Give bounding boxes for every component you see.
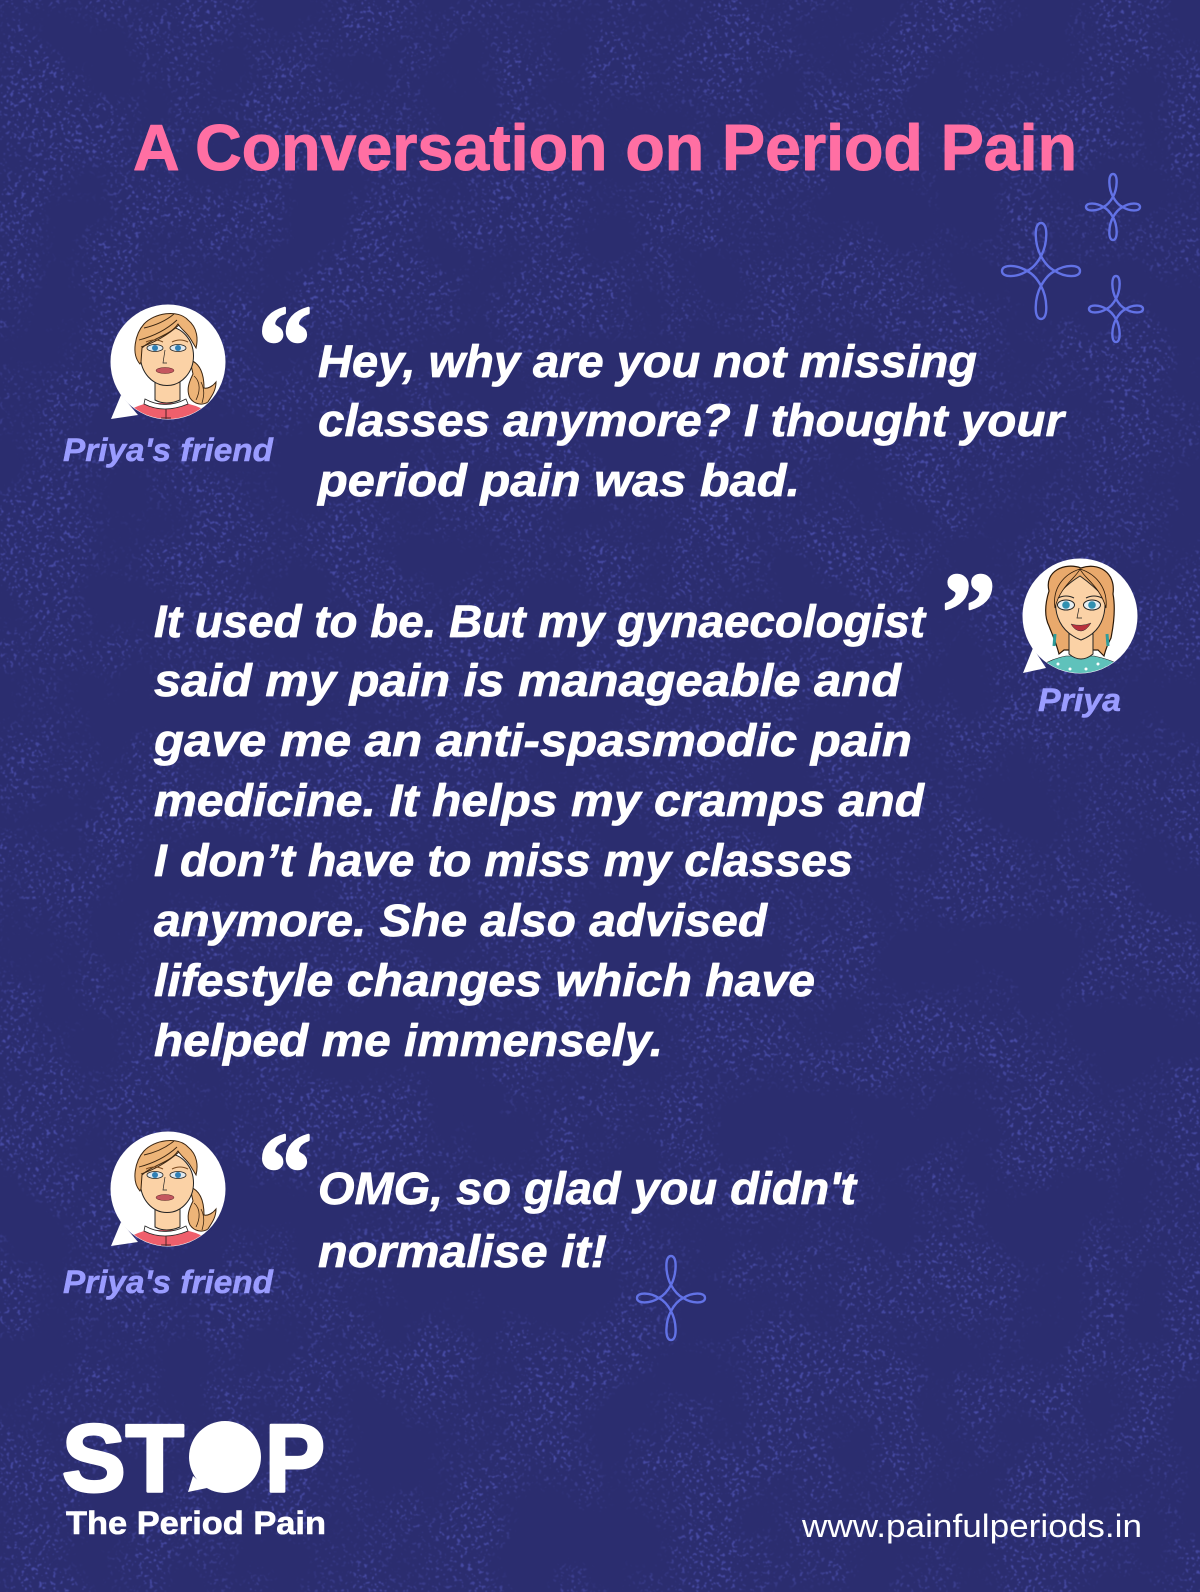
title: A Conversation on Period Pain <box>133 111 1077 184</box>
label: Priya's friend (first): Priya's friend <box>63 432 275 468</box>
message: friend asks: classes anymore? I thought your <box>318 395 1067 446</box>
avatar: Priya's friend (second) <box>110 1132 226 1249</box>
logo: STOP The Period Pain: P <box>265 1405 325 1512</box>
message: friend replies <box>318 1163 858 1277</box>
message: Priya answers: medicine. It helps my cramps and <box>154 775 926 826</box>
logo: STOP The Period Pain: The Period Pain <box>66 1505 326 1541</box>
website url: www.painfulperiods.in <box>801 1508 1142 1544</box>
avatar: Priya's friend (first) <box>110 304 226 422</box>
message: Priya answers: gave me an anti-spasmodic pain <box>153 715 912 766</box>
message: friend replies: OMG, so glad you didn't <box>318 1163 858 1214</box>
icon: opening quote (second): “ <box>258 1111 312 1235</box>
message: Priya answers: It used to be. But my gynaecologist <box>154 596 927 647</box>
icon: opening quote (first): “ <box>258 284 312 408</box>
message: friend replies: normalise it! <box>318 1226 607 1277</box>
icon: closing quote: ” <box>942 551 996 675</box>
label: Priya's friend (second): Priya's friend <box>63 1264 275 1300</box>
message: friend asks <box>317 336 1067 506</box>
message: friend asks: period pain was bad. <box>317 455 800 506</box>
label: Priya: Priya <box>1038 682 1121 718</box>
message: Priya answers <box>153 596 927 1066</box>
message: Priya answers: said my pain is manageable and <box>154 655 903 706</box>
message: Priya answers: lifestyle changes which have <box>154 955 815 1006</box>
message: Priya answers: anymore. She also advised <box>154 895 769 946</box>
icon: sparkle bottom <box>637 1256 705 1340</box>
logo: STOP The Period Pain <box>62 1405 326 1541</box>
logo: STOP The Period Pain: ST <box>62 1405 184 1512</box>
message: Priya answers: helped me immensely. <box>154 1015 663 1066</box>
avatar: Priya <box>1022 558 1138 676</box>
message: friend asks: Hey, why are you not missing <box>318 336 977 387</box>
icon: sparkles top right <box>1002 174 1143 342</box>
message: Priya answers: I don’t have to miss my classes <box>154 835 853 886</box>
